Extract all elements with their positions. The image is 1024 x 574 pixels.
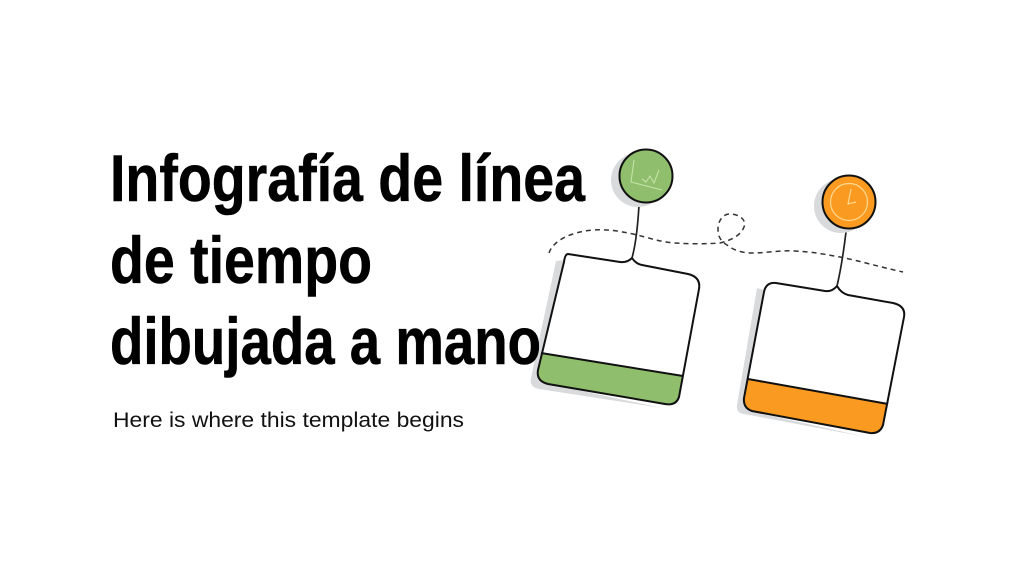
title: de tiempo	[110, 223, 372, 297]
card 1 band divider	[541, 353, 683, 376]
card 2: orange	[737, 283, 904, 437]
icon: orange clock circle	[814, 176, 876, 233]
circle shadow	[611, 153, 665, 207]
circle fill	[620, 150, 672, 202]
chart glyph	[631, 160, 662, 190]
circle shadow	[814, 179, 868, 233]
clock face	[830, 184, 868, 220]
title	[110, 141, 586, 378]
card 2 outline	[744, 283, 904, 433]
icon: green chart circle	[611, 150, 672, 207]
card 1: green	[531, 254, 699, 408]
card 1 green band	[538, 353, 683, 404]
card 1 body	[541, 255, 699, 376]
dashed timeline path	[549, 214, 903, 272]
subtitle: Here is where this template begins	[113, 409, 464, 432]
card 2 shadow	[737, 288, 866, 437]
circle fill	[822, 176, 876, 228]
card 1 shadow	[531, 260, 662, 408]
connector 1	[632, 205, 639, 258]
title: dibujada a mano	[110, 304, 541, 378]
clock hands	[848, 189, 856, 204]
card 2 body	[748, 283, 904, 404]
card 2 band divider	[748, 379, 888, 404]
card 2 orange band	[744, 379, 888, 433]
card 1 outline	[538, 254, 699, 404]
title: Infografía de línea	[110, 141, 586, 215]
connector 2	[837, 232, 846, 286]
